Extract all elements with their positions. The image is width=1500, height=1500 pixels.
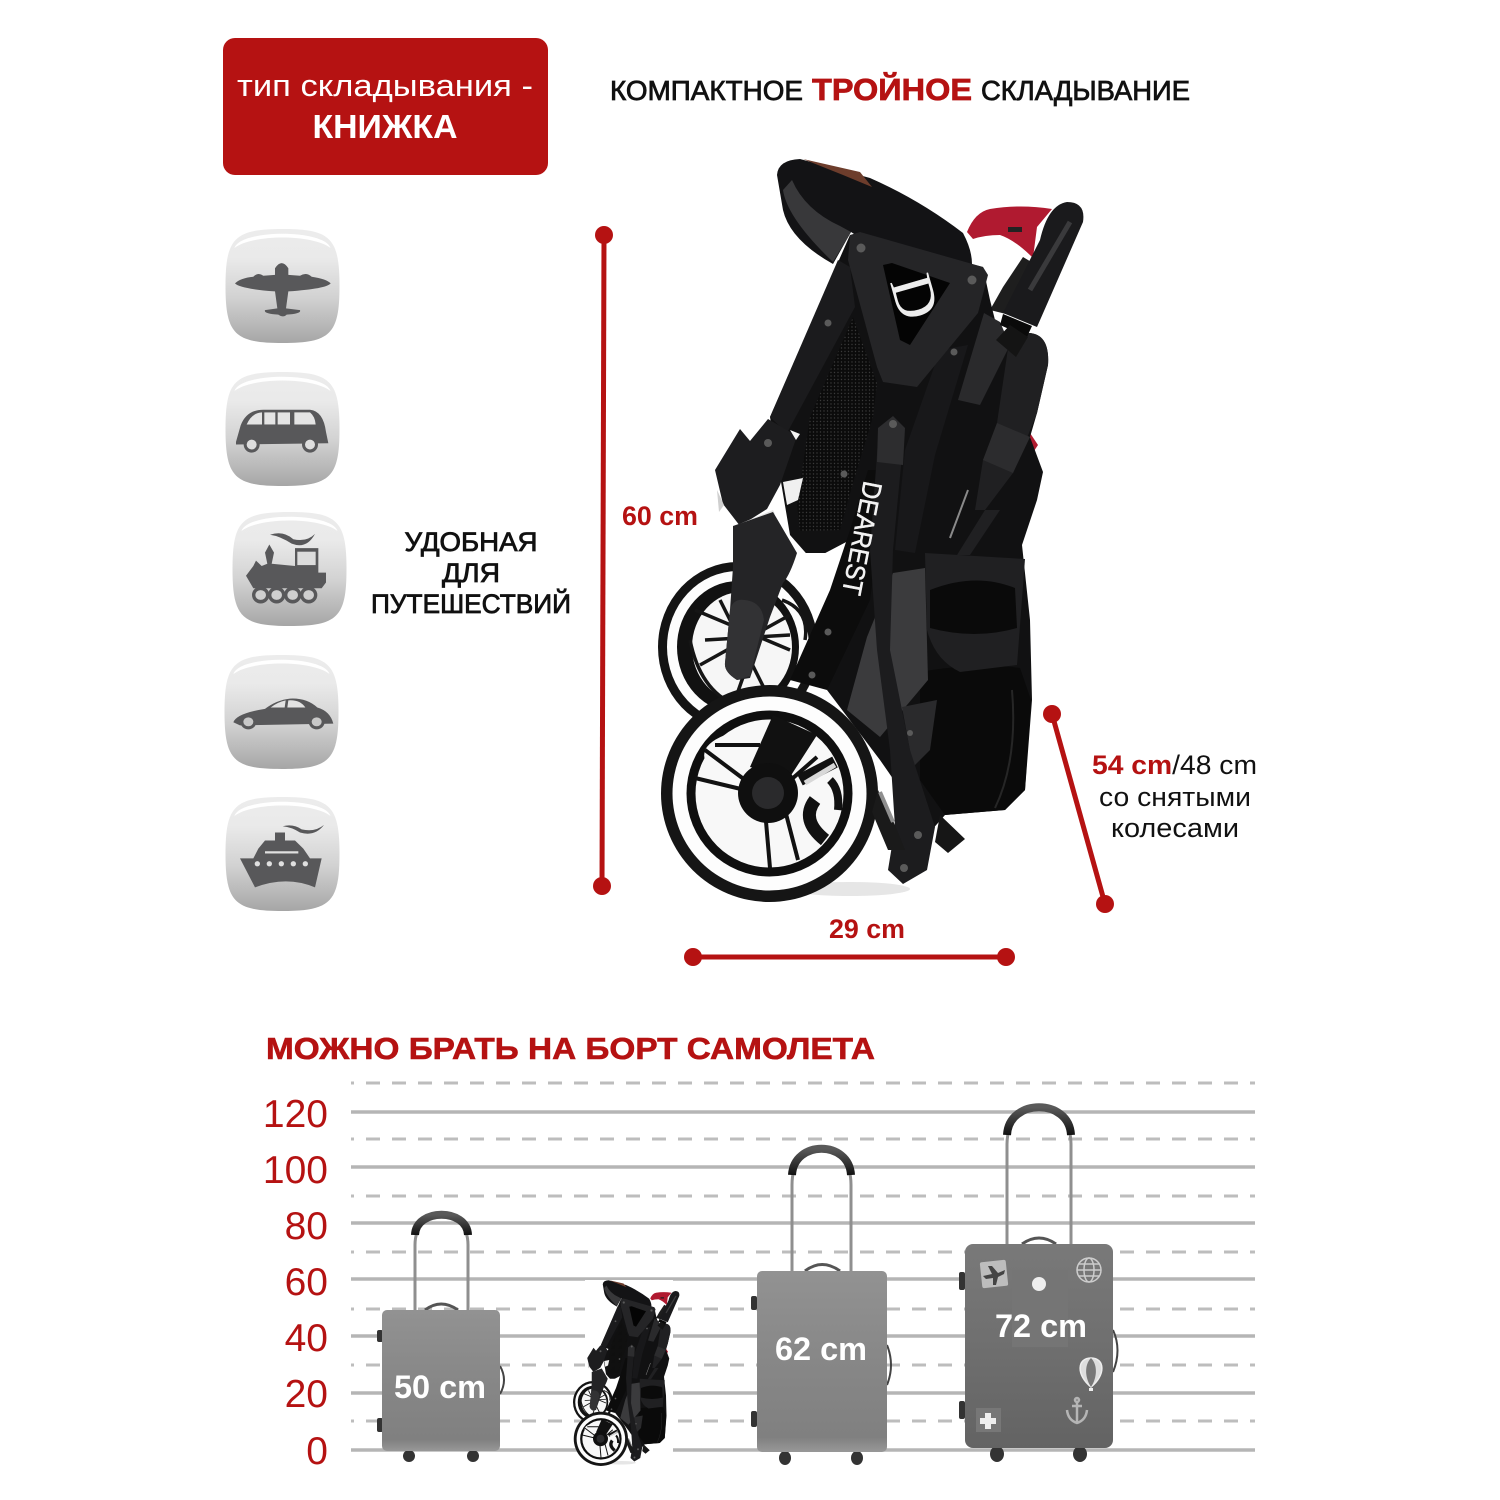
text: convenient for travel: ПУТЕШЕСТВИЙ [371, 588, 571, 619]
suitcase 50 cm: 50 cm [394, 1369, 486, 1405]
icon: airplane [226, 229, 340, 343]
chart grid lines [351, 1083, 1255, 1450]
heading: compact triple fold: КОМПАКТНОЕ [610, 75, 803, 106]
folded stroller photo [658, 159, 1083, 902]
dimension: depth 54/48 cm: 54 cm/48 cm [1092, 750, 1257, 780]
chart axis labels: 120 [263, 1093, 328, 1136]
suitcase 72 cm [959, 1105, 1118, 1462]
icon: ship [226, 797, 340, 911]
transport icons column [224, 229, 346, 911]
suitcase 50 cm [377, 1215, 504, 1462]
chart axis labels: 60 [285, 1261, 328, 1304]
suitcase 62 cm [751, 1148, 891, 1465]
suitcase lock [1032, 1277, 1046, 1291]
mini folded stroller [573, 1280, 679, 1466]
chart axis labels: 20 [285, 1373, 328, 1416]
red badge: fold type [223, 38, 548, 175]
dimension: depth 54/48 cm: колесами [1111, 813, 1239, 843]
heading: can be taken on board: МОЖНО БРАТЬ НА БОРТ САМОЛЕТА [266, 1031, 875, 1066]
stroller emblem letter: D [877, 267, 953, 327]
dimension: depth 54/48 cm: со снятыми [1099, 782, 1251, 812]
sticker: globe [1077, 1258, 1101, 1282]
stroller brand name: DEAREST [836, 479, 888, 597]
text: convenient for travel: УДОБНАЯ [404, 527, 538, 557]
sticker: swiss cross [976, 1408, 1001, 1432]
dimension: width 29 cm: 29 cm [829, 914, 905, 944]
chart axis labels: 40 [285, 1317, 328, 1360]
icon: bus [226, 372, 340, 486]
text: convenient for travel: ДЛЯ [442, 558, 500, 588]
red badge: fold type: КНИЖКА [312, 108, 458, 145]
sticker: airplane [980, 1260, 1008, 1288]
dimension: height 60 cm [593, 226, 698, 895]
dimension: height 60 cm: 60 cm [622, 501, 698, 531]
chart axis labels [263, 1093, 328, 1473]
suitcase 72 cm: 72 cm [995, 1308, 1087, 1344]
red badge: fold type: тип складывания - [237, 68, 533, 103]
chart axis labels: 0 [306, 1430, 328, 1473]
chart axis labels: 80 [285, 1205, 328, 1248]
icon: locomotive [232, 512, 346, 626]
sticker: anchor [1067, 1398, 1087, 1423]
heading: compact triple fold: СКЛАДЫВАНИЕ [981, 75, 1190, 106]
sticker: balloon [1080, 1358, 1102, 1391]
heading: compact triple fold [610, 71, 1190, 107]
heading: compact triple fold: ТРОЙНОЕ [812, 71, 972, 107]
dimension: depth 54/48 cm [1043, 705, 1257, 913]
chart axis labels: 100 [263, 1149, 328, 1192]
dimension: width 29 cm [684, 914, 1015, 966]
text: convenient for travel [371, 527, 571, 619]
height chart [263, 1083, 1255, 1473]
icon: car [224, 655, 338, 769]
suitcase 62 cm: 62 cm [775, 1331, 867, 1367]
